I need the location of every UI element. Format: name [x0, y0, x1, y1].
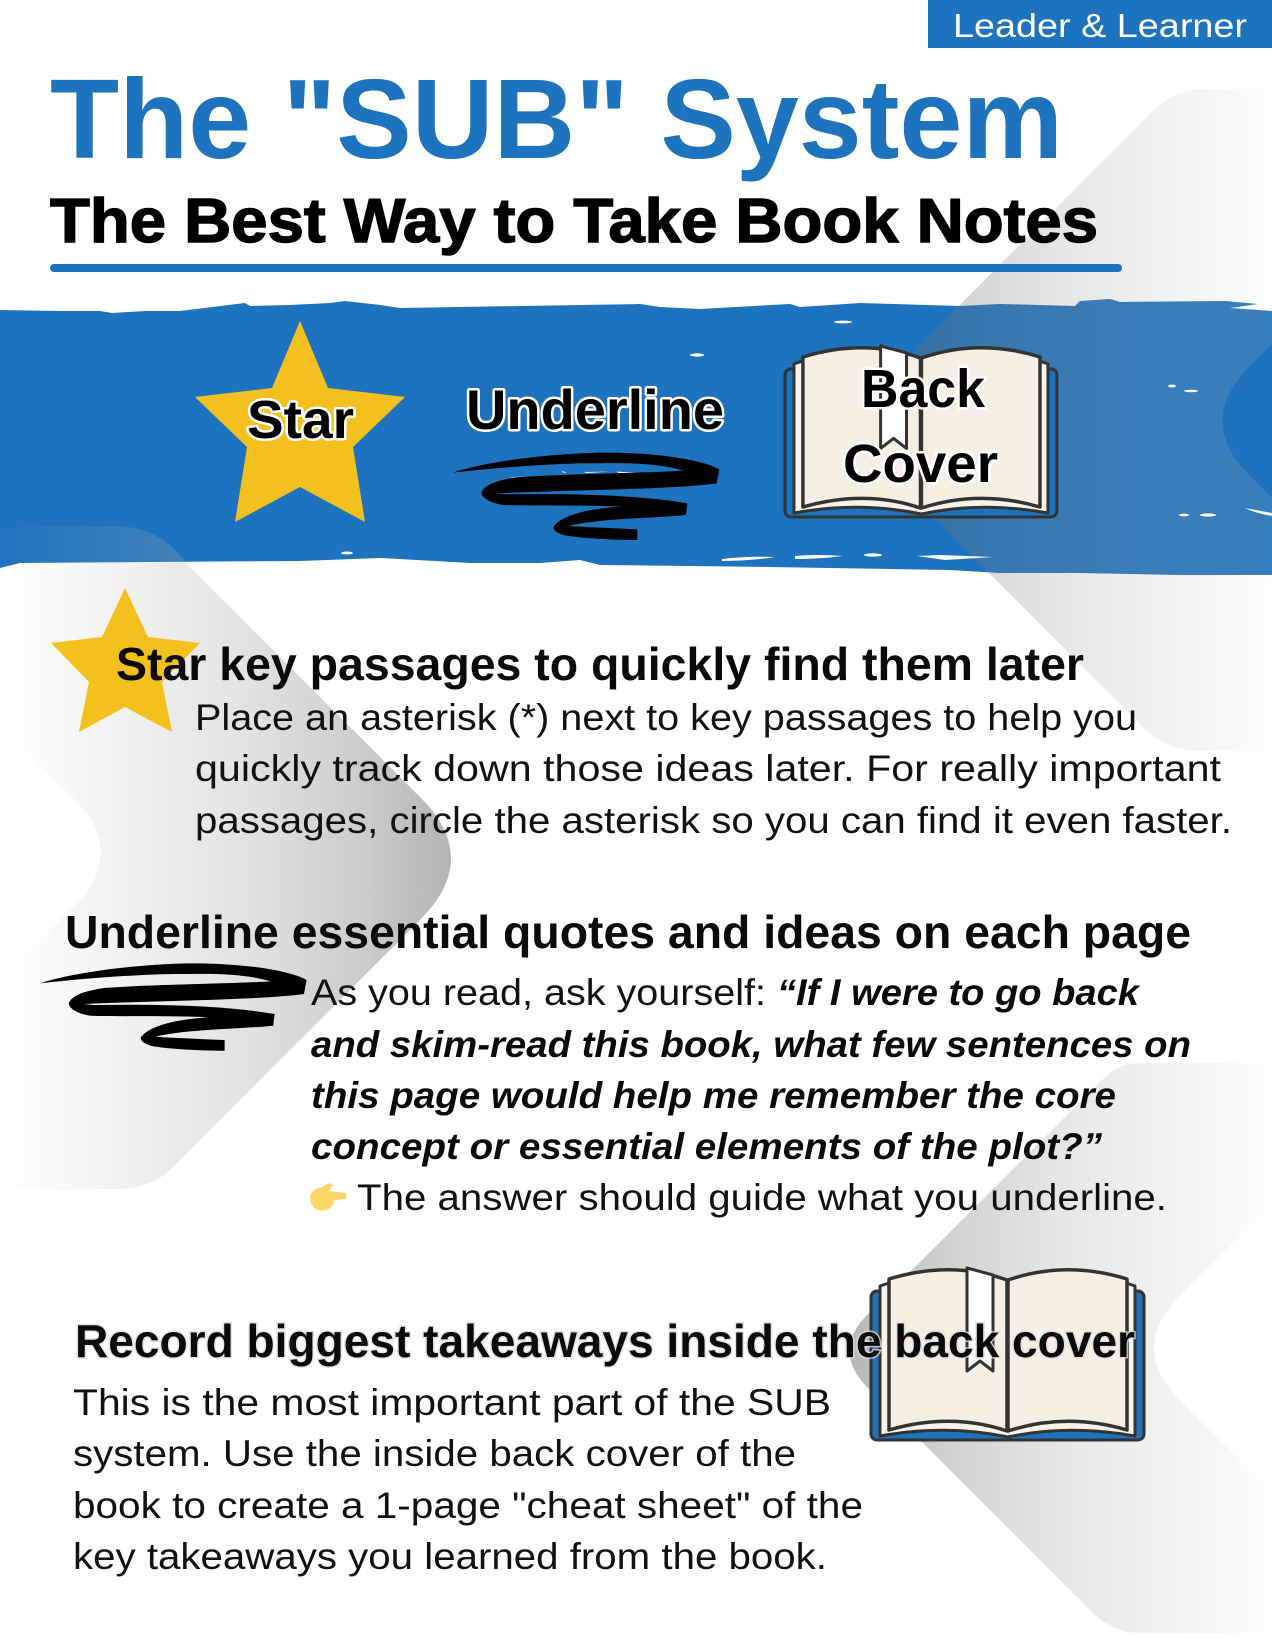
icon: band star — [195, 321, 405, 522]
title: The "SUB" System — [50, 56, 1063, 182]
brand badge — [928, 0, 1272, 48]
brand badge: Leader & Learner — [953, 7, 1247, 44]
title underline — [50, 264, 1122, 272]
label: Back Cover: Cover — [843, 434, 998, 494]
body: back cover: system. Use the inside back cover of the — [73, 1433, 796, 1474]
icon: section scribble — [40, 963, 307, 1051]
label: Back Cover: Back — [861, 359, 986, 419]
body: back cover: book to create a 1-page "cheat sheet" of the — [73, 1485, 863, 1526]
body: underline: concept or essential elements of the plot?” — [311, 1126, 1103, 1167]
background chevron: left — [0, 526, 451, 1189]
panel: blue brush band — [0, 299, 1272, 575]
heading: underline: Underline essential quotes and ideas on each page — [65, 906, 1191, 958]
section 2: underline — [40, 906, 1191, 1218]
section 3: back cover — [73, 1315, 1135, 1577]
background chevron: top right — [858, 89, 1272, 751]
body: underline: and skim-read this book, what few sentences on — [311, 1024, 1191, 1065]
subtitle: The Best Way to Take Book Notes — [50, 187, 1098, 256]
icon: band book with label — [785, 346, 1057, 517]
icon: pointing hand — [310, 1183, 347, 1210]
heading: star: Star key passages to quickly find them later — [116, 638, 1084, 690]
label: Back Cover — [843, 359, 998, 494]
body: star: passages, circle the asterisk so you can find it even faster. — [195, 800, 1232, 841]
body: underline: As you read, ask yourself: — [311, 972, 766, 1013]
label: Star: Star — [247, 390, 354, 450]
body: back cover: This is the most important part of the SUB — [73, 1382, 831, 1423]
body: underline: The answer should guide what you underline. — [357, 1177, 1167, 1218]
background chevron: bottom right — [850, 1063, 1272, 1633]
band underline label and scribble — [453, 378, 724, 540]
icon: section book — [871, 1268, 1144, 1440]
body: underline: this page would help me remember the core — [311, 1075, 1116, 1116]
body: back cover — [73, 1382, 863, 1577]
body: star — [195, 697, 1232, 841]
body: back cover: key takeaways you learned from the book. — [73, 1536, 827, 1577]
body: underline: “If I were to go back — [777, 972, 1141, 1013]
heading: back cover: Record biggest takeaways inside the back cover — [75, 1315, 1135, 1367]
body: star: Place an asterisk (*) next to key passages to help you — [195, 697, 1137, 738]
icon: band scribble — [453, 453, 719, 540]
body: star: quickly track down those ideas later. For really important — [195, 748, 1222, 789]
icon: section star — [51, 588, 200, 732]
body: underline — [311, 972, 1191, 1218]
section 1: star — [116, 638, 1232, 841]
band underline label and scribble: Underline — [466, 378, 724, 441]
